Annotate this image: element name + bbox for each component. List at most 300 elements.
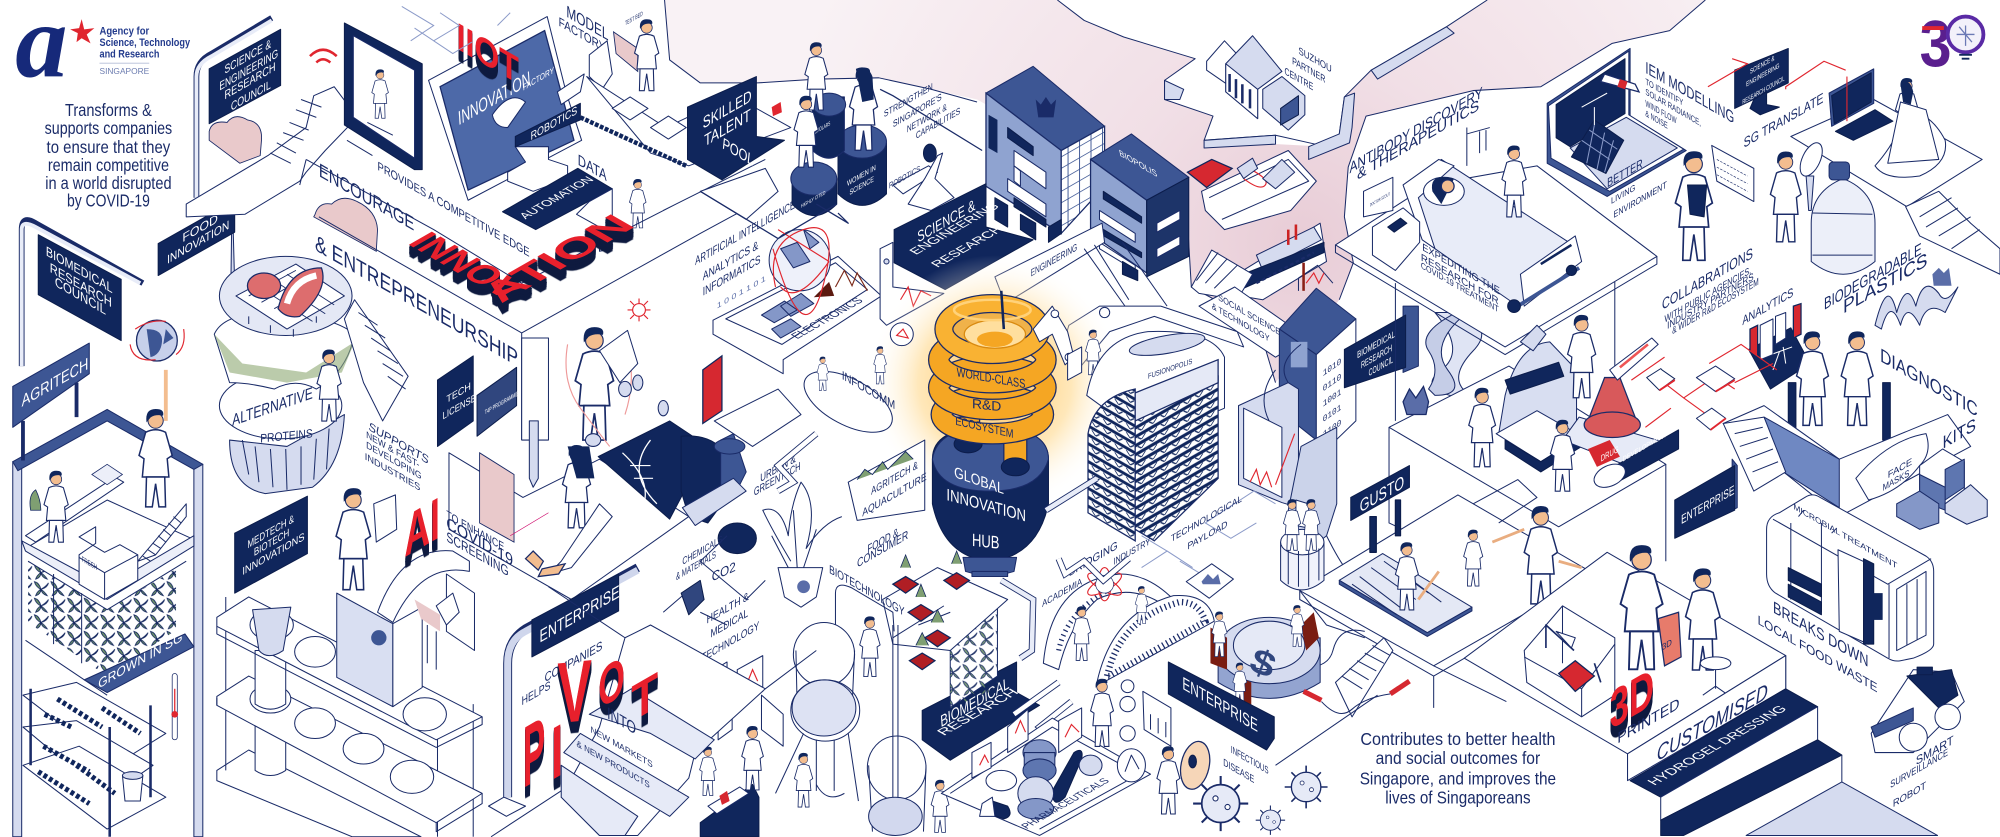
IEM modelling text: TO IDENTIFY bbox=[1645, 76, 1683, 108]
expediting research text: EXPEDITING THE bbox=[1422, 242, 1500, 298]
smart surveillance robot: SURVEILLANCE bbox=[1890, 747, 1948, 791]
medtech sign: MEDTECH & bbox=[247, 512, 295, 551]
scientist with shield bbox=[566, 327, 638, 446]
collaborations text: COLLABRATIONS bbox=[1662, 245, 1753, 314]
panel: enterprise pivot steps: NEW MARKETS bbox=[591, 724, 653, 770]
biomedical research floor sign bbox=[922, 662, 1040, 760]
medtech sign: INNOVATIONS bbox=[242, 531, 304, 578]
icon: red virus bbox=[628, 298, 651, 321]
binary digits: 1 0 0 1 1 0 1 bbox=[717, 274, 766, 311]
icon: pink cloud center bbox=[314, 198, 378, 251]
SG translate label: SG TRANSLATE bbox=[1744, 89, 1824, 151]
model factory label and engineer: FACTORY bbox=[559, 14, 606, 56]
woman with tablet sitting bbox=[526, 445, 612, 577]
biomedical research floor sign: RESEARCH bbox=[933, 687, 1022, 737]
text block: transforms and supports companies: Transforms & bbox=[65, 100, 152, 120]
robotic innovation factory screen bbox=[429, 17, 584, 200]
stairs lower center bbox=[1276, 591, 1409, 765]
3D printer bbox=[1524, 606, 1615, 717]
technological payload circuit: TECHNOLOGICAL bbox=[1171, 493, 1243, 545]
signpost: biomedical council right bbox=[1344, 306, 1418, 388]
lower tube and beaker bbox=[835, 585, 926, 835]
handshake pedestal bbox=[1281, 499, 1324, 590]
supports new industries text: NEW & FAST- bbox=[366, 430, 419, 471]
strengthen network label: SINGAPORE'S bbox=[893, 92, 942, 131]
golden spring bulb: R&D bbox=[972, 396, 1002, 414]
connector pipes bbox=[700, 89, 982, 239]
health tech charts and desk bbox=[700, 656, 783, 837]
dollar table meeting bbox=[1210, 605, 1320, 708]
IEM modelling text: IEM MODELLING bbox=[1645, 58, 1734, 128]
text block: contributes to better health: lives of Singaporeans bbox=[1385, 788, 1531, 808]
text block: transforms and supports companies: in a world disrupted bbox=[45, 173, 172, 193]
panel: microbial treatment machine: BREAKS DOWN bbox=[1773, 597, 1868, 671]
text block: contributes to better health: Contributes to better health bbox=[1360, 729, 1555, 749]
strengthen network label: NETWORK & bbox=[907, 101, 947, 136]
platform under talent pool bbox=[700, 168, 778, 219]
grown in SG band: GROWN IN SG bbox=[98, 628, 183, 692]
health and medical technology label: HEALTH & bbox=[707, 590, 749, 627]
syringe and pad machine bbox=[449, 338, 689, 599]
signpost: biomedical council right: BIOMEDICAL bbox=[1357, 329, 1395, 361]
icon: wifi signal bbox=[310, 50, 337, 63]
panel: diagnostic platform and masks: FACE bbox=[1888, 456, 1912, 481]
data tower: 0101 bbox=[1323, 401, 1342, 425]
red tablet rack bbox=[703, 356, 722, 423]
PIVOT red letters: O bbox=[598, 643, 625, 721]
smart surveillance robot: SMART bbox=[1916, 732, 1954, 768]
panel: agritech tower bbox=[13, 320, 203, 837]
panel: gusto platform with runners bbox=[1300, 466, 1594, 708]
conical flask and plate bbox=[1562, 417, 1679, 467]
data tower: 1010 bbox=[1323, 356, 1341, 379]
PIVOT red letters: I bbox=[551, 707, 563, 797]
panel: microbial treatment machine bbox=[1758, 495, 1934, 696]
pedestals with scientists: WOMEN IN bbox=[847, 163, 876, 188]
PIVOT red letters bbox=[523, 642, 658, 807]
biomedical research floor sign: BIOMEDICAL bbox=[939, 675, 1011, 731]
data tower: 1100 bbox=[1323, 417, 1341, 440]
signpost: biomedical research council: COUNCIL bbox=[55, 274, 106, 318]
text block: contributes to better health: Singapore, and improves the bbox=[1360, 768, 1556, 788]
fusionopolis building bbox=[1087, 329, 1224, 541]
model factory label and engineer: MODEL bbox=[566, 2, 608, 45]
science and engineering research floor sign: RESEARCH bbox=[927, 224, 1007, 269]
plant pot CO2: CO2 bbox=[712, 558, 736, 585]
PIVOT red letters: T bbox=[631, 661, 658, 733]
supports new industries text: INDUSTRIES bbox=[365, 451, 420, 494]
stairs right top bbox=[1906, 191, 2000, 274]
gusto sign: GUSTO bbox=[1360, 471, 1404, 517]
biodegradable plastics bbox=[1824, 239, 1958, 329]
panel: enterprise pivot steps: & NEW PRODUCTS bbox=[577, 738, 650, 790]
health and medical technology label: MEDICAL bbox=[710, 607, 748, 641]
viruses infectious disease: DISEASE bbox=[1223, 757, 1254, 786]
pedestals with scientists: SCHOLARS bbox=[812, 121, 830, 137]
IEM modelling text: SOLAR RADIANCE, bbox=[1645, 86, 1701, 128]
bedside cabinet with phone bbox=[1364, 177, 1420, 270]
pedestals with scientists bbox=[772, 42, 886, 216]
stairs and crates bbox=[79, 504, 186, 599]
suzhou partner centre: SUZHOU bbox=[1298, 46, 1332, 76]
AI analytics label: INFORMATICS bbox=[703, 252, 761, 299]
viruses infectious disease: INFECTIOUS bbox=[1231, 745, 1269, 777]
DNA navy panel bbox=[598, 421, 708, 519]
data tower: 1001 bbox=[1323, 386, 1342, 410]
panel: 3D printing platform bbox=[1434, 545, 1786, 781]
logo: A*STAR: SINGAPORE bbox=[99, 66, 150, 76]
logo: A*STAR bbox=[15, 0, 191, 100]
smart surveillance robot: ROBOT bbox=[1893, 780, 1926, 810]
model factory label and engineer: TEST BED bbox=[625, 10, 643, 28]
data label: DATA bbox=[578, 152, 607, 185]
data tower bbox=[1279, 263, 1356, 459]
AI analytics label: ARTIFICIAL INTELLIGENCE bbox=[695, 197, 795, 268]
logo: A*STAR: Science, Technology bbox=[99, 37, 191, 49]
AI analytics label: ANALYTICS & bbox=[703, 238, 758, 284]
IIOT red letters: IIOT bbox=[457, 15, 519, 93]
enterprise central sign: ENTERPRISE bbox=[1182, 673, 1258, 736]
signpost: science and engineering research council: ENGINEERING bbox=[219, 46, 278, 94]
suzhou partner centre: PARTNER bbox=[1292, 56, 1325, 86]
circuit conveyor and floor tiles bbox=[580, 77, 791, 166]
diagnostic heading and people bbox=[1788, 331, 1978, 440]
strengthen network label: CAPABILITIES bbox=[916, 106, 960, 142]
cables from cabinet bbox=[1264, 344, 1384, 668]
smart surveillance robot bbox=[1871, 667, 1964, 810]
plant tower bbox=[883, 551, 1008, 708]
global innovation hub lightbulb base bbox=[932, 427, 1048, 577]
viruses infectious disease bbox=[1193, 745, 1328, 835]
chemicals and materials label: CHEMICALS bbox=[682, 534, 722, 568]
globe with orbits bbox=[769, 228, 830, 315]
analyst and flowchart bbox=[1091, 679, 1171, 746]
shelves with trays bbox=[23, 682, 166, 837]
biodegradable plastics: BIODEGRADABLE bbox=[1824, 239, 1922, 314]
panel: antibody hospital platform bbox=[1335, 84, 1657, 421]
large bottle and magnifier bbox=[1796, 139, 1875, 274]
biotechnology label: BIOTECHNOLOGY bbox=[829, 562, 905, 619]
signpost: science and engineering research council: SCIENCE & bbox=[224, 36, 271, 77]
heading: and entrepreneurship: & ENTREPRENEURSHIP bbox=[315, 229, 518, 372]
skilled talent pool sign bbox=[688, 77, 784, 180]
microscope bbox=[681, 434, 756, 554]
robotic innovation factory screen: FACTORY bbox=[523, 65, 554, 93]
heading: innovation 3D red: ATION bbox=[472, 209, 644, 308]
social science and technology plate bbox=[1199, 287, 1314, 357]
agritech sign bbox=[13, 343, 89, 460]
signpost: biomedical research council: BIOMEDICAL bbox=[46, 243, 113, 297]
food and consumer label: FOOD & bbox=[867, 525, 898, 557]
stairs upper left bbox=[186, 87, 357, 217]
provides a competitive edge text: PROVIDES A COMPETITIVE EDGE bbox=[378, 159, 530, 260]
pipe support bbox=[508, 568, 638, 797]
global innovation hub lightbulb base: INNOVATION bbox=[946, 485, 1026, 526]
collaborations text: & WIDER R&D ECOSYSTEM bbox=[1672, 276, 1759, 337]
global innovation hub lightbulb base: HUB bbox=[972, 530, 999, 553]
golden spring bulb: ECOSYSTEM bbox=[955, 414, 1014, 441]
panel: enterprise pivot steps: HELPS bbox=[522, 678, 551, 708]
strengthen network label: STRENGTHEN bbox=[884, 81, 933, 120]
skilled talent pool sign: SKILLED bbox=[703, 86, 752, 133]
agritech and aquaculture sign: AQUACULTURE bbox=[862, 471, 927, 520]
bridging academia label: ACADEMIA bbox=[1042, 576, 1083, 610]
panel: alternative proteins burger: ALTERNATIVE bbox=[232, 384, 313, 430]
antibody discovery heading: ANTIBODY DISCOVERY bbox=[1349, 84, 1483, 177]
seated farmer at bench bbox=[26, 464, 124, 542]
screen with wave bbox=[880, 242, 944, 325]
robotic arm telescope: ROBOTICS bbox=[889, 163, 920, 191]
signpost: biomedical council right: RESEARCH bbox=[1361, 343, 1392, 372]
SG translate laptop platform bbox=[1791, 69, 1982, 207]
hospital bed bbox=[1403, 128, 1582, 313]
engineer beside spring bbox=[1085, 330, 1101, 375]
tablet device bbox=[344, 23, 422, 170]
glass beaker stool bbox=[776, 622, 860, 807]
expediting research text: COVID-19 TREATMENT bbox=[1421, 260, 1499, 315]
agritech and aquaculture sign: AGRITECH & bbox=[871, 459, 918, 498]
signpost: food innovation: FOOD bbox=[182, 211, 218, 245]
panel: pharmaceuticals tray bbox=[941, 708, 1151, 835]
tech license and T4P clipboards: TECH bbox=[446, 381, 471, 406]
logo: A*STAR: and Research bbox=[99, 48, 160, 60]
PIVOT red letters: V bbox=[557, 642, 592, 742]
medtech sign: BIOTECH bbox=[254, 527, 289, 559]
golden spring bulb: WORLD-CLASS bbox=[957, 364, 1025, 391]
panel: medtech rack bbox=[217, 419, 513, 837]
ships bbox=[1188, 151, 1327, 300]
small SERC monitor sign: SCIENCE & bbox=[1750, 55, 1775, 76]
food and consumer label: CONSUMER bbox=[857, 527, 908, 571]
enterprise right sign bbox=[1675, 459, 1737, 538]
box camera equipment bbox=[681, 580, 704, 615]
microscope lab platform bbox=[1389, 315, 1679, 561]
enterprise hanging sign: ENTERPRISE bbox=[540, 581, 619, 647]
infocomm turtle shell: INFOCOMM bbox=[842, 368, 895, 412]
electronics device bbox=[713, 256, 881, 374]
DNA helix right bbox=[1426, 310, 1482, 398]
panel: alternative proteins burger: PROTEINS bbox=[260, 426, 313, 446]
panel: IEM modelling laptop bbox=[1547, 48, 1686, 221]
panel: enterprise pivot steps bbox=[489, 568, 765, 835]
collaborations text: INDUSTRY PARTNERS bbox=[1667, 271, 1754, 332]
health and medical technology label: TECHNOLOGY bbox=[702, 620, 759, 665]
technological payload circuit bbox=[1142, 491, 1276, 598]
yoga mat bbox=[1339, 554, 1472, 633]
social science and technology plate: SOCIAL SCIENCE bbox=[1218, 292, 1280, 337]
thermometer bbox=[171, 673, 178, 740]
tower: biopolis: BIOPOLIS bbox=[1118, 148, 1159, 180]
heading: encourage: ENCOURAGE bbox=[319, 160, 414, 236]
signpost: food innovation: INNOVATION bbox=[167, 217, 229, 267]
gusto sign bbox=[1351, 466, 1409, 552]
signpost: biomedical council right: COUNCIL bbox=[1369, 354, 1393, 379]
biotechnology scientist bbox=[860, 616, 880, 677]
signpost: science and engineering research council bbox=[196, 18, 281, 198]
science and engineering research floor sign: ENGINEERING bbox=[905, 201, 1003, 257]
fusionopolis building: FUSIONOPOLIS bbox=[1148, 356, 1192, 381]
red circuit board bbox=[1631, 344, 1777, 430]
tiger logo on roof bbox=[1036, 97, 1056, 117]
bridging academia label bbox=[1042, 536, 1151, 610]
panel: IEM modelling laptop: ENVIRONMENT bbox=[1614, 179, 1667, 221]
stairs treads bbox=[270, 99, 321, 163]
text block: transforms and supports companies bbox=[45, 100, 172, 211]
engineering gantry: ENGINEERING bbox=[1031, 242, 1077, 280]
IEM modelling text: WIND FLOW bbox=[1645, 98, 1677, 126]
text block: transforms and supports companies: by COVID-19 bbox=[67, 191, 150, 211]
signpost: science and engineering research council: COUNCIL bbox=[231, 77, 271, 114]
vertical farm leaves bbox=[26, 561, 186, 695]
supports new industries text: SUPPORTS bbox=[369, 419, 429, 467]
signpost: science and engineering research council: RESEARCH bbox=[224, 59, 276, 102]
panel: diagnostic platform and masks bbox=[1723, 406, 1987, 529]
social science and technology plate: & TECHNOLOGY bbox=[1212, 301, 1269, 344]
customised hydrogel stairs bbox=[1628, 656, 1938, 835]
antibody discovery heading: & THERAPEUTICS bbox=[1357, 97, 1479, 184]
collaborations text: WITH PUBLIC AGENCIES, bbox=[1665, 265, 1751, 326]
PIVOT red letters: P bbox=[523, 698, 545, 807]
text block: transforms and supports companies: supports companies bbox=[45, 118, 172, 138]
customised hydrogel stairs: CUSTOMISED bbox=[1657, 678, 1768, 766]
analytics chart bbox=[1742, 284, 1810, 389]
pipes centre bbox=[778, 434, 1129, 753]
panel: IEM modelling laptop: BETTER bbox=[1607, 155, 1643, 190]
analytics chart: ANALYTICS bbox=[1742, 284, 1793, 328]
text block: contributes to better health bbox=[1360, 729, 1556, 808]
AI red letters: AI bbox=[404, 485, 440, 570]
panel: enterprise pivot steps: COMPANIES bbox=[545, 637, 602, 685]
automation floor sign: AUTOMATION bbox=[516, 174, 597, 221]
global innovation hub lightbulb base: GLOBAL bbox=[954, 464, 1004, 498]
medtech sign bbox=[235, 496, 307, 593]
golden spring bulb bbox=[939, 300, 1046, 476]
tiger mascot sign bbox=[1403, 386, 1429, 415]
robotic innovation factory screen: INNOVATION bbox=[456, 67, 533, 129]
panel: 3D printing platform: PRINTED bbox=[1617, 695, 1679, 748]
signpost: biomedical research council: RESEARCH bbox=[50, 260, 112, 310]
panel: microbial treatment machine: LOCAL FOOD WASTE bbox=[1758, 612, 1878, 696]
tech license and T4P clipboards bbox=[438, 356, 518, 446]
science and engineering research floor sign bbox=[894, 184, 1033, 290]
suzhou partner centre: CENTRE bbox=[1284, 66, 1313, 94]
panel: microbial treatment machine: TREATMENT bbox=[1842, 529, 1897, 571]
biodegradable plastics: PLASTICS bbox=[1843, 249, 1927, 319]
white microscope bbox=[1499, 342, 1577, 459]
kits label: KITS bbox=[1943, 414, 1976, 453]
logo: 30 years: 3 bbox=[1920, 7, 1952, 81]
heading: innovation 3D red bbox=[399, 209, 644, 308]
signpost: food innovation bbox=[158, 191, 235, 286]
enterprise right sign: ENTERPRISE bbox=[1681, 482, 1734, 527]
tower: biopolis bbox=[1091, 134, 1189, 281]
AI analytics label bbox=[695, 197, 795, 299]
urban and greentech label: URBAN & bbox=[760, 453, 796, 485]
to enhance covid screening text: TO ENHANCE bbox=[446, 509, 504, 554]
technological payload circuit: PAYLOAD bbox=[1188, 519, 1228, 553]
bedside cabinet with phone: DOCTOR SCOUT bbox=[1370, 191, 1390, 208]
science and engineering research floor sign: SCIENCE & bbox=[916, 197, 977, 246]
enterprise hanging sign bbox=[532, 574, 619, 657]
wire circuit decoration bbox=[402, 6, 510, 54]
robotics band: ROBOTICS bbox=[531, 104, 577, 143]
bridging academia label: INDUSTRY bbox=[1114, 536, 1151, 568]
heading: innovation 3D red: INNOV bbox=[399, 227, 534, 304]
data tower: 0110 bbox=[1323, 371, 1341, 395]
small SERC monitor sign bbox=[1708, 48, 1846, 115]
chemicals and materials label: & MATERIALS bbox=[676, 549, 716, 583]
logo: A*STAR: Agency for bbox=[99, 25, 150, 37]
drug development pill bbox=[1614, 430, 1679, 482]
health and medical technology label bbox=[702, 590, 759, 665]
electronics device: ELECTRONICS bbox=[788, 296, 866, 341]
background: pink sea map bbox=[665, 0, 1705, 383]
small SERC monitor sign: RESEARCH COUNCIL bbox=[1742, 75, 1785, 107]
worker at automation bbox=[629, 179, 646, 228]
panel: IEM modelling laptop: LIVING bbox=[1611, 182, 1635, 206]
pedestals with scientists: SCIENCE bbox=[849, 174, 874, 197]
icon: pink cloud left bbox=[209, 117, 262, 163]
stairs and crates: FRESH bbox=[82, 554, 97, 572]
logo: 30 years bbox=[1920, 7, 1983, 81]
panel: diagnostic platform and masks: MASKS bbox=[1883, 468, 1909, 494]
translator man with speech card bbox=[1675, 145, 1801, 260]
coastline map edges bbox=[665, 0, 1705, 383]
pedestals with scientists: HIGHLY CITED bbox=[801, 190, 826, 210]
infocomm turtle shell bbox=[714, 323, 913, 446]
robotics band bbox=[515, 103, 580, 147]
monitor equipment cabinet bbox=[1239, 383, 1337, 561]
microscope lab platform: DEVELOPMENT bbox=[1622, 431, 1667, 464]
agritech sign: AGRITECH bbox=[22, 354, 88, 411]
panel: pharmaceuticals tray: PHARMACEUTICALS bbox=[1019, 777, 1113, 831]
dollar table meeting: $ bbox=[1245, 641, 1281, 686]
IEM modelling text: & NOISE bbox=[1645, 108, 1668, 131]
panel: microbial treatment machine: MICROBIAL bbox=[1793, 501, 1840, 538]
urban and greentech label: GREENTECH bbox=[754, 460, 800, 499]
text block: transforms and supports companies: to ensure that they bbox=[47, 137, 170, 157]
spring glow bbox=[867, 255, 1122, 510]
microscope lab platform: DRUG bbox=[1601, 444, 1619, 464]
panel: enterprise pivot steps: INTO bbox=[607, 703, 636, 739]
diagnostic heading and people: DIAGNOSTIC bbox=[1880, 345, 1978, 422]
supports new industries text: DEVELOPING bbox=[366, 440, 422, 483]
stair treads bbox=[1920, 198, 1980, 249]
text block: contributes to better health: and social outcomes for bbox=[1376, 748, 1540, 768]
engineering gantry bbox=[995, 223, 1244, 370]
expediting research text bbox=[1421, 242, 1500, 315]
3D printed red: 3D bbox=[1610, 656, 1654, 742]
expediting research text: RESEARCH FOR bbox=[1421, 252, 1499, 308]
robotic arm telescope bbox=[889, 144, 954, 210]
supports new industries text bbox=[365, 419, 429, 494]
panel: alternative proteins burger bbox=[214, 256, 408, 494]
text block: transforms and supports companies: remain competitive bbox=[48, 155, 169, 175]
robot claws above spring bbox=[1001, 291, 1074, 365]
IEM modelling text bbox=[1645, 58, 1734, 131]
wall switch box bbox=[1068, 347, 1082, 380]
to enhance covid screening text: COVID-19 bbox=[446, 513, 513, 570]
skilled talent pool sign: TALENT bbox=[704, 105, 751, 151]
suzhou partner centre bbox=[1207, 36, 1332, 130]
signpost: biomedical research council bbox=[22, 220, 143, 366]
customised hydrogel stairs: HYDROGEL DRESSING bbox=[1644, 703, 1790, 787]
tech license and T4P clipboards: T4P PROGRAMME bbox=[485, 390, 518, 417]
scientist near beaker bbox=[931, 780, 949, 832]
stacked boxes bbox=[1897, 449, 1987, 529]
model factory label and engineer bbox=[559, 2, 659, 91]
worker lifting globe bbox=[130, 320, 184, 507]
